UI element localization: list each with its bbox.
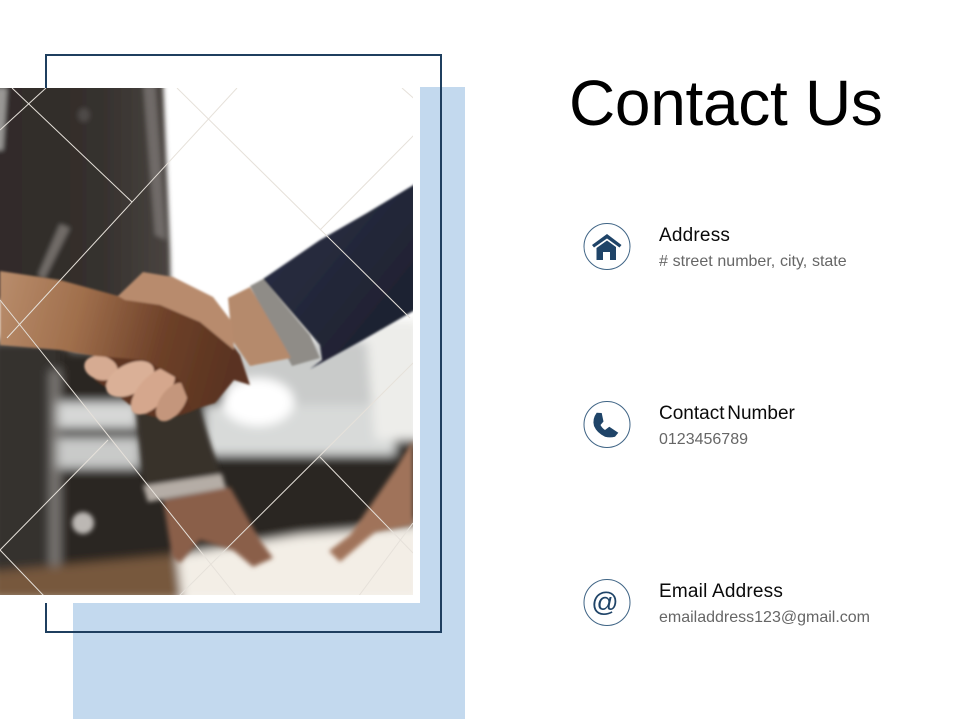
phone heading: Contact Number <box>659 403 795 424</box>
contact item: phone <box>584 401 795 448</box>
right sleeve <box>263 184 415 369</box>
light blue backing block <box>73 87 465 719</box>
email value: emailaddress123@gmail.com <box>659 609 870 626</box>
handshake photo <box>0 80 420 600</box>
image panel: blue block, frame and handshake photo <box>0 54 465 719</box>
fingers <box>94 356 196 418</box>
email heading: Email Address <box>659 581 783 602</box>
icon: at sign <box>584 579 630 626</box>
address heading: Address <box>659 225 730 246</box>
thumb <box>118 272 234 350</box>
contact item: email <box>584 579 870 626</box>
left arm and clasped hand <box>0 271 250 410</box>
navy outline frame <box>46 55 441 632</box>
title: Contact Us <box>569 67 883 139</box>
white photo mat <box>0 88 420 603</box>
phone value: 0123456789 <box>659 431 748 448</box>
icon: phone <box>584 401 630 448</box>
address value: # street number, city, state <box>659 253 847 270</box>
diagonal lattice lines <box>0 88 419 598</box>
contact item: address <box>584 223 847 270</box>
icon: house <box>584 223 630 270</box>
icon: at sign: @ <box>591 587 619 617</box>
